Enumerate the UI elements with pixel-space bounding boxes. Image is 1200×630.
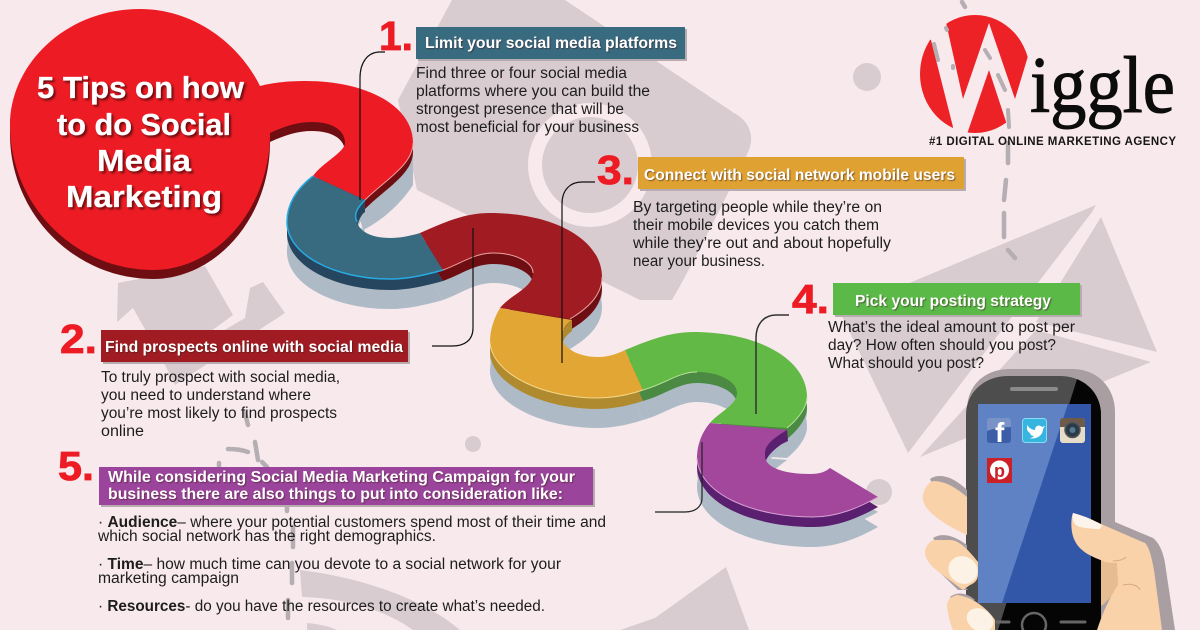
step 5 heading bar [99,467,595,507]
thumb and palm [1071,513,1162,630]
middle finger [925,540,978,590]
title: Marketing [66,179,222,214]
connector line: step 5 [655,442,702,512]
step 5 list [97,514,606,615]
step 2 number: 2. [60,316,97,362]
phone bottom keys [997,620,1085,624]
step 2 text: To truly prospect with social media, [101,369,340,386]
step 4 text: day? How often should you post? [828,337,1056,354]
step 1 text: platforms where you can build the [416,83,650,100]
dashed flight paths [219,2,1015,618]
step 4 heading bar [833,283,1082,317]
ribbon segment: step 2 dark red [420,213,602,319]
step 1 heading bar [416,27,687,61]
upper finger [923,481,967,535]
step 5 heading bar: While considering Social Media Marketing Campaign for your [108,469,575,486]
hand shadow [1100,520,1175,630]
palm shade below thumb [1101,556,1121,605]
step 5 list: which social network has the right demographics. [97,528,436,545]
step 5 number: 5. [58,443,94,489]
connector line: step 3 [562,182,595,363]
step 2 heading bar [101,330,410,364]
logo: Wiggle: iggle [1030,42,1175,130]
hand [923,476,1162,630]
step 3 text: while they’re out and about hopefully [632,235,891,252]
icon: twitter [1022,418,1046,442]
step 4 number: 4. [792,276,829,322]
step 3 text: By targeting people while they’re on [633,199,882,216]
step 5 list: marketing campaign [98,570,239,587]
step 1 number: 1. [379,13,413,59]
logo: Wiggle [920,15,1176,145]
step 2 text: you need to understand where [101,387,311,404]
logo: Wiggle: #1 DIGITAL ONLINE MARKETING AGENCY [929,136,1176,148]
step 5 heading bar: business there are also things to put into consideration like: [108,486,563,503]
ribbon segment: step 5 purple [697,423,878,517]
middle fingernail [943,551,983,589]
icon: facebook: f [995,417,1005,448]
ribbon segment: red title blob and step 1 [10,9,413,270]
step 3 text: near your business. [633,253,765,270]
step 4 text: What’s the ideal amount to post per [828,319,1075,336]
step 4 text [828,319,1075,372]
phone [966,376,1110,630]
icon: pinterest [987,458,1012,483]
step 3 heading bar [638,157,966,191]
step 4 text: What should you post? [828,355,984,372]
step 4 heading bar: Pick your posting strategy [855,293,1051,310]
phone shadow [967,369,1115,630]
step 5 list: · Time– how much time can you devote to a social network for your [98,556,561,573]
title: Media [97,143,192,178]
ribbon side walls [10,18,878,527]
step 2 heading bar: Find prospects online with social media [105,339,403,356]
step 2 text: online [101,423,144,440]
step 1 text: most beneficial for your business [416,119,639,136]
step 1 text: Find three or four social media [416,65,627,82]
ribbon segment: step 3 yellow [490,308,643,398]
ribbon segment: step 1 blue [287,176,443,279]
step 2 text [101,369,340,440]
step 1 heading bar: Limit your social media platforms [425,35,677,52]
thumb crease [1113,557,1140,590]
title: 5 Tips on how [37,70,245,105]
step 3 text [632,199,891,270]
lower fingernail [962,603,998,630]
title: to do Social [57,107,231,142]
icon: pinterest: p [994,461,1005,481]
ribbon inner wall wedges [355,200,788,458]
title [37,70,245,214]
connector line: step 4 [756,315,789,414]
phone screen [978,404,1091,603]
step 3 number: 3. [597,147,634,193]
step 5 list: · Resources- do you have the resources to create what’s needed. [98,598,545,615]
step 1 text: strongest presence that will be [416,101,624,118]
step 1 text [416,65,650,136]
phone speaker [1012,387,1056,391]
ribbon edge highlights [287,143,878,517]
step 2 text: you’re most likely to find prospects [101,405,337,422]
icon: instagram [1060,418,1085,443]
finger shadows [930,476,975,605]
icon: facebook [987,417,1011,448]
step 3 text: their mobile devices you catch them [633,217,879,234]
ribbon segment: step 4 green [625,332,807,428]
ribbon ground shadow [287,150,878,547]
lower finger [947,595,995,630]
thumbnail [1072,513,1102,529]
step 5 list: · Audience– where your potential customers spend most of their time and [98,514,606,531]
connector line: step 2 [432,228,473,346]
phone home button [1022,613,1046,630]
step 3 heading bar: Connect with social network mobile users [644,167,955,184]
connector line: step 1 [360,52,385,200]
